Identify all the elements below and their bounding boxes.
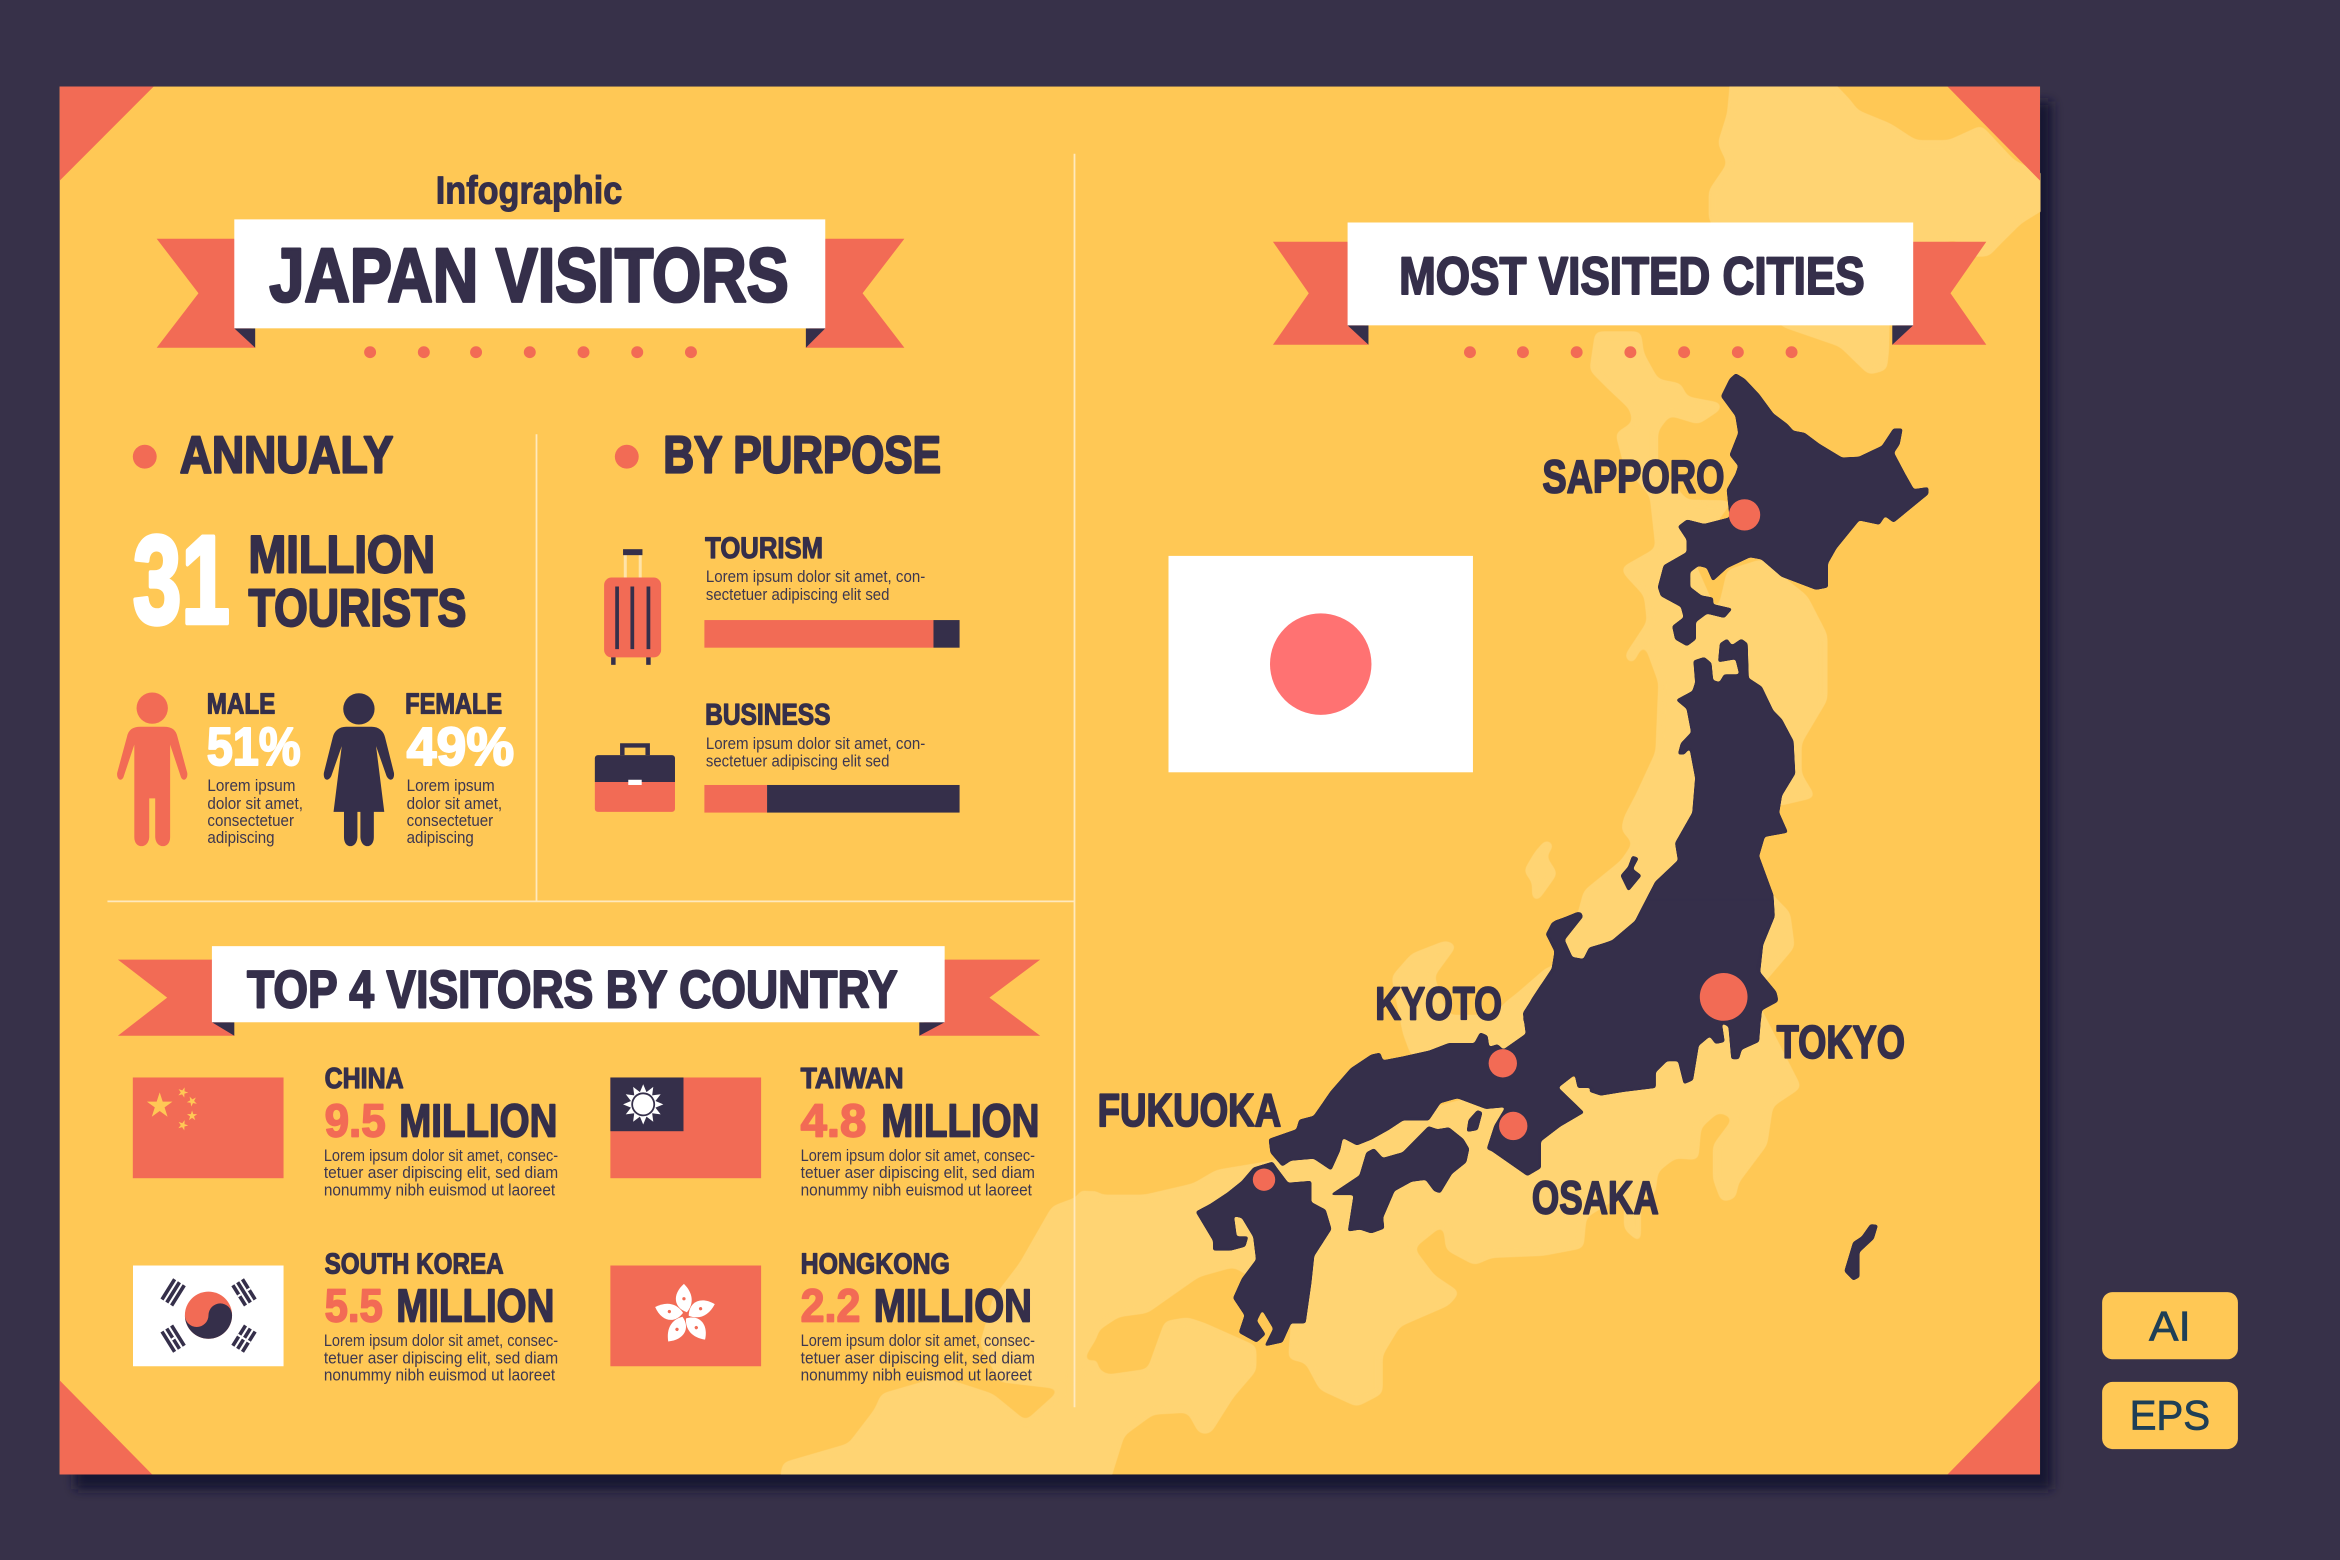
stat: male 51%: Lorem ipsum [207, 777, 295, 795]
island: sado [1621, 856, 1641, 891]
city marker: tokyo: TOKYO [1777, 1016, 1905, 1068]
city marker: osaka [1499, 1112, 1659, 1223]
text: hong kong stats: HONGKONG [801, 1249, 950, 1281]
ribbon: most visited cities [1273, 222, 1986, 345]
text: china stats: CHINA [325, 1063, 404, 1095]
bar: tourism [704, 620, 960, 648]
title dots [364, 346, 697, 358]
text: hong kong stats: nonummy nibh euismod ut laoreet [801, 1366, 1032, 1384]
corner triangles [60, 87, 2040, 1474]
text: china stats: MILLION [399, 1094, 557, 1146]
flag: china [133, 1077, 284, 1178]
badge: AI: AI [2149, 1303, 2191, 1350]
text: tourism: Lorem ipsum dolor sit amet, con- [706, 568, 925, 586]
text: taiwan stats [801, 1063, 1039, 1199]
text: taiwan stats: tetuer aser dipiscing elit, sed diam [801, 1164, 1035, 1182]
text: business [705, 699, 925, 770]
flag: hong kong [610, 1266, 761, 1366]
stat: male 51% [207, 688, 303, 847]
flag: japan [1169, 556, 1473, 772]
stat: female 49% [405, 688, 514, 847]
stat: male 51%: dolor sit amet, [207, 795, 303, 813]
ribbon: top 4 visitors by country [118, 946, 1040, 1036]
title ribbon: Japan Visitors [157, 219, 904, 348]
island: northern honshu [1523, 639, 1795, 1020]
stat: male 51%: 51% [207, 717, 301, 777]
panel: china [133, 1063, 558, 1199]
stat: female 49%: consectetuer [407, 812, 494, 830]
text: china stats: Lorem ipsum dolor sit amet, consec- [324, 1147, 558, 1165]
bar: business [704, 785, 960, 813]
stat: 31 million tourists: 31 [133, 510, 230, 650]
badge: AI [2102, 1292, 2238, 1359]
text: hong kong stats: 2.2 [801, 1279, 860, 1331]
island: hokkaido [1658, 374, 1928, 646]
stat: female 49%: dolor sit amet, [407, 795, 502, 813]
text: south korea stats: SOUTH KOREA [325, 1249, 504, 1281]
heading: annualy: ANNUALY [180, 425, 393, 483]
main yellow panel [60, 87, 2040, 1474]
text: china stats: tetuer aser dipiscing elit, sed diam [324, 1164, 558, 1182]
text: hong kong stats: tetuer aser dipiscing elit, sed diam [801, 1349, 1035, 1367]
text: south korea stats: Lorem ipsum dolor sit amet, consec- [324, 1332, 558, 1350]
icon: male figure [117, 692, 187, 846]
text: hong kong stats: MILLION [874, 1279, 1032, 1331]
text: china stats [324, 1063, 558, 1199]
city marker: sapporo: SAPPORO [1542, 450, 1724, 502]
text: taiwan stats: TAIWAN [801, 1063, 904, 1095]
stat: male 51%: consectetuer [207, 812, 294, 830]
text: hong kong stats: Lorem ipsum dolor sit amet, consec- [801, 1332, 1035, 1350]
text: south korea stats: MILLION [396, 1279, 554, 1331]
panel: taiwan [610, 1063, 1039, 1199]
stat: female 49%: Lorem ipsum [407, 777, 495, 795]
city marker: sapporo [1542, 450, 1760, 531]
text: hong kong stats [801, 1249, 1035, 1384]
text: business: sectetuer adipiscing elit sed [706, 752, 889, 770]
icon: female figure [324, 693, 394, 846]
island: tanegashima [1845, 1225, 1877, 1280]
title ribbon: Japan Visitors: JAPAN VISITORS [269, 233, 789, 318]
text: south korea stats: tetuer aser dipiscing elit, sed diam [324, 1349, 558, 1367]
background map silhouette [779, 73, 2054, 1482]
text: china stats: nonummy nibh euismod ut laoreet [324, 1181, 556, 1199]
text: south korea stats [324, 1249, 558, 1384]
island: shikoku [1331, 1127, 1469, 1233]
text: taiwan stats: MILLION [881, 1094, 1039, 1146]
ribbon dots [1464, 346, 1798, 358]
island: southern honshu [1269, 900, 1778, 1176]
flag: south korea [133, 1266, 284, 1366]
panel shadow [75, 101, 2052, 1489]
text: china stats: 9.5 [325, 1094, 386, 1146]
stat: female 49%: 49% [407, 717, 514, 777]
panel: annually [117, 425, 514, 847]
panel: by purpose [595, 425, 960, 813]
text: south korea stats: nonummy nibh euismod ut laoreet [324, 1366, 556, 1384]
ribbon: most visited cities: MOST VISITED CITIES [1399, 247, 1865, 306]
stat: 31 million tourists: MILLION [248, 525, 435, 584]
text: tourism: sectetuer adipiscing elit sed [706, 586, 889, 604]
text: taiwan stats: Lorem ipsum dolor sit amet, consec- [801, 1147, 1035, 1165]
text: tourism [705, 532, 925, 604]
text: south korea stats: 5.5 [325, 1279, 383, 1331]
text: business: Lorem ipsum dolor sit amet, con- [706, 735, 925, 753]
badge: EPS: EPS [2130, 1392, 2210, 1439]
icon: briefcase [595, 745, 675, 812]
text: taiwan stats: nonummy nibh euismod ut laoreet [801, 1181, 1032, 1199]
city marker: osaka: OSAKA [1532, 1171, 1659, 1223]
flag: taiwan [610, 1077, 761, 1178]
map: japan islands [1196, 374, 1928, 1346]
text: tourism: TOURISM [705, 532, 823, 565]
city marker: kyoto [1375, 977, 1517, 1077]
island: awaji [1467, 1110, 1482, 1132]
city marker: fukuoka: FUKUOKA [1098, 1084, 1281, 1136]
city marker: fukuoka [1098, 1084, 1281, 1191]
text: taiwan stats: 4.8 [801, 1094, 866, 1146]
stat: male 51%: adipiscing [207, 829, 275, 847]
heading: by purpose: BY PURPOSE [663, 425, 941, 483]
panel: hong kong [610, 1249, 1035, 1384]
stat: 31 million tourists: TOURISTS [248, 579, 466, 638]
badge: EPS [2102, 1382, 2238, 1449]
stat: female 49%: FEMALE [405, 688, 502, 720]
stat: female 49%: adipiscing [407, 829, 474, 847]
heading: Infographic: Infographic [436, 170, 622, 213]
island: kyushu [1196, 1162, 1331, 1346]
stat: male 51%: MALE [207, 688, 275, 720]
ribbon: top 4 visitors by country: TOP 4 VISITORS BY COUNTRY [247, 960, 898, 1019]
city marker: kyoto: KYOTO [1375, 977, 1502, 1029]
text: business: BUSINESS [705, 699, 830, 732]
city marker: tokyo [1700, 973, 1905, 1068]
panel: south korea [133, 1249, 558, 1384]
icon: suitcase [604, 549, 661, 665]
stat: 31 million tourists [133, 510, 466, 650]
